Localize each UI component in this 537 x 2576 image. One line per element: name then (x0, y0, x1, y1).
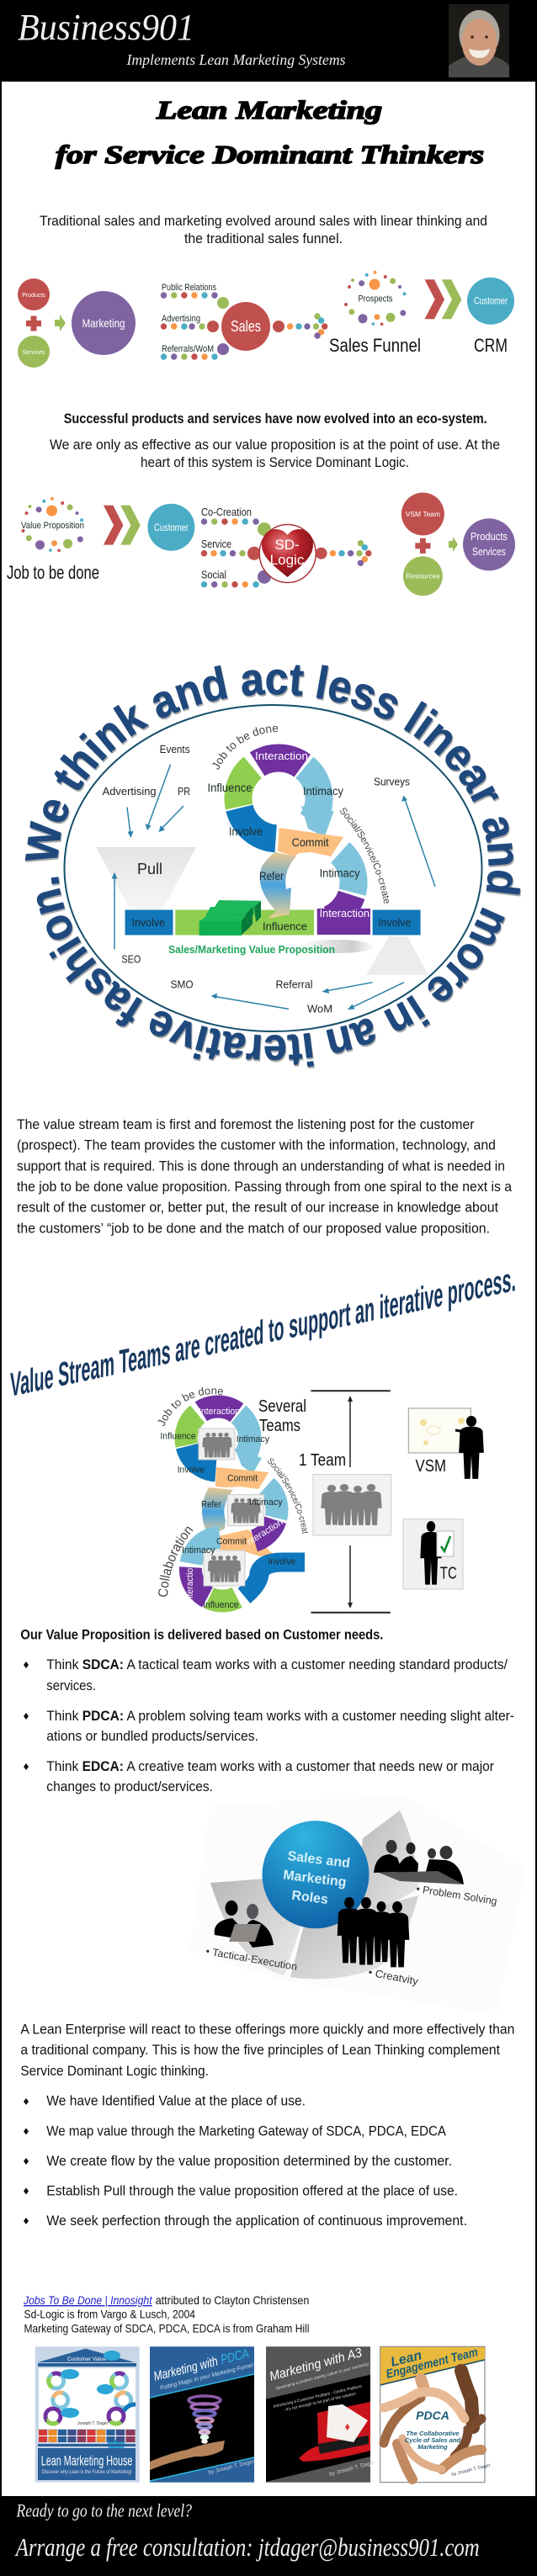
channels into sales (161, 283, 229, 360)
marketing circle: Marketing (82, 316, 125, 330)
blue roles circle (263, 1821, 369, 1928)
channels into SD-Logic: Co-Creation (201, 506, 252, 518)
sales circle: Sales (231, 318, 261, 335)
flow arrows (111, 765, 435, 1010)
book: marketing with PDCA: Putting Magic in your Marketing Funnel (160, 2362, 254, 2392)
spiral labels: Interaction (255, 750, 308, 762)
brand name: Business901 (18, 7, 194, 48)
marketing inputs (103, 743, 410, 1015)
title (56, 95, 484, 169)
diagram: team spirals (158, 1386, 484, 1614)
customer circle: Customer (154, 522, 189, 533)
products and services circle: Products (471, 530, 508, 543)
book: lean engagement team: Lean (390, 2348, 423, 2370)
spiral labels: Involve (178, 1466, 205, 1476)
range bracket arrows (311, 1391, 391, 1613)
eco-system text (50, 411, 500, 470)
references: Sd-Logic is from Vargo & Lusch, 2004 (24, 2308, 195, 2321)
book: marketing with A3 (266, 2345, 376, 2483)
book: lean marketing house: Lean Marketing House (41, 2453, 132, 2469)
book: marketing with A3: - it's not enough to be part of the solution (283, 2392, 357, 2413)
lean enterprise paragraph: A Lean Enterprise will react to these offerings more quickly and more effectively than (20, 2022, 514, 2038)
TC tile: TC (440, 1565, 457, 1583)
spiral labels: Influence (160, 1432, 196, 1442)
value proposition heading: Our Value Proposition is delivered based on Customer needs. (20, 1627, 383, 1642)
marketing inputs: SMO (171, 978, 194, 991)
spiral labels: Influence (203, 1600, 239, 1610)
blue roles circle: Roles (290, 1889, 329, 1907)
value stream paragraph: the job to be done value proposition. Passing through from one spiral to the next is a (17, 1179, 513, 1195)
marketing inputs: PR (178, 785, 190, 798)
value stream paragraph: result of the customer or, better put, the result of our increase in knowledge about (17, 1201, 498, 1216)
book: lean engagement team: Cycle of Sales and (405, 2436, 461, 2444)
problem solving group (374, 1840, 464, 1884)
intro text (40, 214, 487, 246)
spiral labels: Commit (216, 1537, 247, 1547)
bullets: SDCA PDCA EDCA: services. (46, 1678, 96, 1693)
eco-system text: Successful products and services have now evolved into an eco-system. (64, 411, 487, 427)
eco-system text: heart of this system is Service Dominant Logic. (141, 455, 409, 470)
dotted arrow from sales (273, 313, 327, 339)
spiral labels: Involve (229, 825, 263, 838)
customer circle (147, 504, 194, 551)
soft tilted backdrop (189, 1796, 526, 2015)
marketing inputs: Referral (276, 978, 313, 991)
portrait photo (449, 4, 509, 77)
value stream paragraph: support that is required. This is done through an understanding of what is needed in (17, 1158, 505, 1174)
book: lean marketing house: Customer Value (67, 2356, 106, 2362)
bullets: lean principles: Establish Pull through the value proposition offered at the place of use. (46, 2183, 458, 2198)
bullets: SDCA PDCA EDCA (24, 1657, 514, 1794)
tagline: Implements Lean Marketing Systems (126, 51, 345, 68)
SD-Logic heart: SD- (274, 537, 300, 553)
customer circle (467, 278, 514, 325)
book: marketing with A3: by Joseph T. Dager (328, 2459, 376, 2478)
title: Lean Marketing (156, 95, 382, 125)
spiral labels: nteraction (245, 1518, 284, 1547)
intro text: the traditional sales funnel. (184, 231, 343, 246)
role labels (205, 1883, 498, 1988)
several teams label: Teams (259, 1417, 300, 1435)
blue roles circle: Sales and (287, 1849, 351, 1871)
spiral labels: Collaboration (158, 1526, 194, 1597)
sales circle (221, 302, 270, 351)
book: lean engagement team: Marketing (417, 2443, 448, 2451)
SD-Logic heart: Logic (270, 552, 305, 568)
book: lean marketing house: Discover why Lean is the Future of Marketing! (42, 2470, 132, 2475)
bullets: lean principles: We map value through the Marketing Gateway of SDCA, PDCA, EDCA (46, 2123, 446, 2139)
book: lean engagement team: The Collaborative (407, 2430, 459, 2437)
spiral labels: Interaction (199, 1407, 240, 1417)
products and services circle (463, 518, 515, 570)
intro text: Traditional sales and marketing evolved around sales with linear thinking and (40, 214, 487, 229)
prospects dot ring: Prospects (359, 294, 393, 305)
spiral labels (158, 1386, 308, 1610)
grey wedges (210, 1810, 418, 1979)
channels into sales: Referrals/WoM (162, 344, 214, 354)
value proposition caption: Sales/Marketing Value Proposition (168, 943, 335, 956)
value proposition bar (125, 900, 421, 936)
channels into SD-Logic (201, 506, 271, 587)
VSM team plus resources: Resources (406, 572, 440, 580)
book: lean engagement team: by Joseph T. Dager (451, 2463, 492, 2478)
spiral labels: Social/Service/Co-create (268, 1459, 308, 1534)
book: marketing with PDCA: Marketing with (152, 2355, 220, 2384)
references (23, 2293, 309, 2335)
CRM label: CRM (474, 335, 508, 356)
spiral labels: Commit (292, 836, 329, 849)
spiral labels: Influence (207, 782, 253, 794)
references: Marketing Gateway of SDCA, PDCA, EDCA is from Graham Hill (24, 2321, 309, 2335)
diagram: service dominant logic (7, 493, 515, 596)
book: marketing with PDCA: PDCA (219, 2346, 251, 2367)
tactical execution pair (215, 1900, 274, 1948)
spiral labels: Intimacy (303, 785, 343, 798)
several teams label: Several (258, 1397, 306, 1416)
VSM team plus resources (401, 493, 444, 596)
products and services circle: Services (472, 545, 506, 558)
bullets: SDCA PDCA EDCA: Think PDCA: A problem solving team works with a customer needing slight alter- (46, 1709, 514, 1724)
book: lean marketing house: Joseph T. Dager (77, 2421, 109, 2426)
marketing inputs: Events (160, 743, 190, 755)
bullets: lean principles: We create flow by the value proposition determined by the customer. (46, 2154, 452, 2169)
channels into sales: Public Relations (162, 283, 216, 293)
marketing inputs: WoM (307, 1003, 332, 1015)
arrow to marketing (55, 315, 66, 331)
role labels: • Tactical-Execution (205, 1945, 298, 1973)
book: lean engagement team: Engagement Team (385, 2345, 480, 2382)
channels into sales: Advertising (162, 314, 200, 324)
channels into SD-Logic: Service (201, 538, 231, 550)
value proposition bar: Influence (263, 920, 307, 933)
book: marketing with PDCA (150, 2346, 256, 2483)
spiral labels: Interaction (185, 1563, 195, 1603)
spiral labels: Intimacy (320, 867, 360, 880)
SD-Logic heart (259, 525, 316, 582)
bullets: SDCA PDCA EDCA: Think SDCA: A tactical team works with a customer needing standard products/ (46, 1657, 508, 1672)
references: attributed to Clayton Christensen (156, 2293, 309, 2307)
customer circle: Customer (474, 295, 508, 307)
spiral rings (173, 1393, 305, 1612)
spiral labels: Intimacy (249, 1497, 283, 1508)
lean enterprise paragraph: Service Dominant Logic thinking. (20, 2064, 209, 2079)
footer prompt: Ready to go to the next level? (16, 2500, 192, 2521)
spiral labels: Intimacy (237, 1434, 269, 1444)
value proposition bar: Involve (378, 917, 412, 929)
lean enterprise paragraph: a traditional company. This is how the five principles of Lean Thinking complement (20, 2043, 500, 2058)
bullets: SDCA PDCA EDCA: changes to product/services. (46, 1779, 213, 1794)
bullets: SDCA PDCA EDCA: Think EDCA: A creative team works with a customer that needs new or major (46, 1759, 494, 1774)
marketing circle (72, 291, 136, 355)
chevrons (424, 279, 461, 319)
spiral labels: Refer (259, 870, 284, 883)
role labels: • Creatvity (367, 1966, 420, 1988)
spiral labels: Job to be done (158, 1386, 223, 1426)
spiral labels: Social/Service/Co-create (340, 808, 389, 904)
bullets: lean principles (24, 2094, 467, 2229)
marketing inputs: SEO (121, 953, 141, 966)
chevrons (104, 506, 141, 545)
spiral labels: Interaction (320, 908, 370, 920)
book: lean marketing house (35, 2346, 140, 2483)
spiral labels: Involve (268, 1556, 295, 1566)
team tiles in spiral (199, 1428, 264, 1586)
arrow to products (449, 537, 458, 552)
book: lean engagement team (380, 2345, 492, 2483)
blue roles circle: Marketing (282, 1868, 347, 1890)
spiral labels (207, 725, 389, 920)
references: Jobs To Be Done | Innosight (23, 2293, 153, 2307)
products plus services (18, 278, 50, 368)
footer (14, 2500, 480, 2562)
job to be done label: Job to be done (7, 562, 99, 583)
eco-system text: We are only as effective as our value proposition is at the point of use. At the (50, 437, 500, 453)
bullets: lean principles: We have Identified Value at the place of use. (46, 2094, 306, 2109)
dotted arrow from heart (316, 540, 371, 566)
diagram: iterative ellipse (64, 704, 483, 1032)
diagram: sales and marketing roles (189, 1796, 526, 2015)
VSM team plus resources: VSM Team (406, 510, 440, 518)
circular heading: We think and act less linear and more in an iterative fashion. (25, 665, 522, 1068)
header (18, 4, 509, 77)
spiral labels: Job to be done (212, 725, 278, 770)
value proposition dot ring (21, 497, 84, 552)
pull funnel: Pull (137, 861, 162, 877)
bullets: SDCA PDCA EDCA: ations or bundled products/services. (46, 1729, 258, 1744)
spiral labels: Commit (227, 1474, 258, 1484)
products plus services: Services (23, 350, 45, 356)
value proposition bar: Involve (131, 917, 165, 929)
value stream paragraph (17, 1117, 513, 1236)
VSM whiteboard and presenter (408, 1408, 484, 1479)
role labels: • Problem Solving (416, 1883, 498, 1907)
diagram: traditional funnel (18, 271, 514, 368)
creativity group (338, 1897, 409, 1967)
book: marketing with A3: Marketing with A3 (268, 2345, 364, 2384)
inverted funnel (366, 936, 428, 975)
value proposition dot ring: Value Proposition (21, 521, 84, 531)
lean enterprise paragraph (20, 2022, 514, 2079)
marketing inputs: Advertising (103, 785, 157, 798)
channels into SD-Logic: Social (201, 569, 226, 581)
sales funnel label: Sales Funnel (329, 335, 421, 356)
value stream paragraph: (prospect). The team provides the customer with the information, technology, and (17, 1138, 496, 1153)
TC tile (403, 1519, 463, 1589)
spiral (221, 741, 370, 940)
book: lean engagement team: PDCA (416, 2409, 449, 2422)
spiral labels: Intimacy (182, 1545, 215, 1556)
value proposition caption (168, 940, 375, 956)
prospects dot ring (344, 271, 406, 326)
value stream paragraph: The value stream team is first and foremost the listening post for the customer (17, 1117, 475, 1132)
title: for Service Dominant Thinkers (56, 140, 484, 169)
value stream paragraph: the customers’ “job to be done and the match of our proposed value proposition. (17, 1221, 490, 1236)
spiral labels: Refer (201, 1500, 221, 1510)
VSM whiteboard and presenter: VSM (416, 1457, 446, 1476)
bullets: lean principles: We seek perfection through the application of continuous improvement. (46, 2213, 467, 2229)
pull funnel (96, 847, 196, 910)
one team label: 1 Team (299, 1451, 346, 1470)
marketing inputs: Surveys (374, 776, 410, 787)
one team tile (313, 1475, 391, 1535)
ellipse outline (64, 705, 481, 1031)
products plus services: Products (22, 293, 45, 299)
book: marketing with PDCA: by Joseph T. Dager (208, 2458, 256, 2476)
several teams label (258, 1397, 306, 1435)
book: marketing with A3: Developing a problem solving culture in your marketing (275, 2361, 370, 2392)
book: marketing with A3: Introducing a Customer Problem - Centric Platform (273, 2384, 363, 2409)
